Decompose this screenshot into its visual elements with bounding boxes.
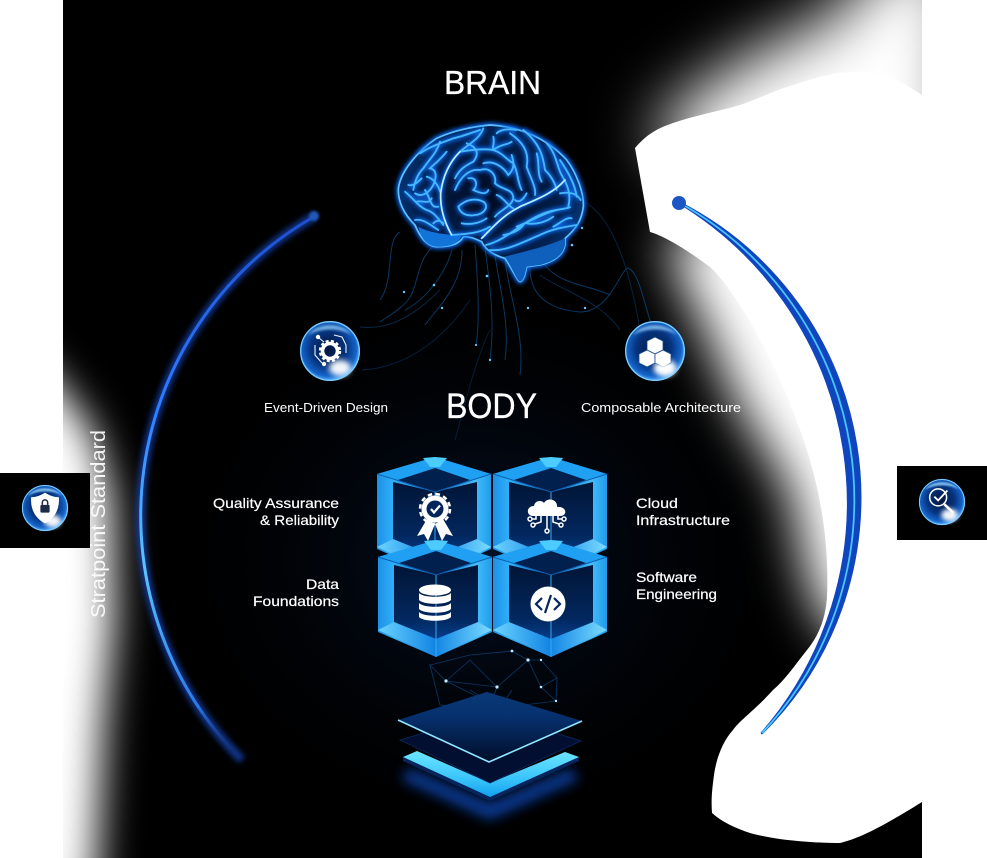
label: Software Engineering: Software	[636, 569, 697, 585]
node: Composable Architecture	[581, 321, 741, 415]
white torn shape on right side	[635, 72, 922, 843]
top plate	[398, 692, 582, 762]
icon: cloud circuit	[528, 500, 566, 533]
label: Cloud Infrastructure	[636, 495, 730, 528]
left arc	[141, 211, 319, 760]
label: Software Engineering	[636, 569, 717, 602]
icon: code brackets	[530, 586, 566, 622]
label: Data Foundations: Foundations	[253, 593, 339, 609]
icon: glowing brain	[398, 125, 583, 282]
heading: BODY: BODY	[446, 387, 537, 426]
label: Event-Driven Design	[264, 401, 388, 415]
side badge: security	[0, 473, 90, 548]
label: Cloud Infrastructure: Cloud	[636, 495, 678, 511]
bright bottom plate	[403, 751, 579, 801]
icon: hexagon cubes orb	[625, 321, 685, 381]
network mesh above platform	[430, 650, 557, 710]
icon: shield lock orb	[22, 485, 68, 531]
label: Software Engineering: Engineering	[636, 586, 717, 602]
icon: gear orb	[300, 321, 360, 381]
label: Data Foundations	[253, 576, 339, 609]
dark middle plate	[400, 728, 581, 783]
label: Quality Assurance & Reliability: Quality Assurance	[213, 495, 339, 511]
right arc	[672, 196, 860, 733]
icon: database	[419, 584, 451, 621]
cube: data foundations	[378, 540, 492, 657]
cube: quality assurance	[377, 457, 491, 574]
tendril nodes	[403, 227, 586, 361]
label: Data Foundations: Data	[306, 576, 339, 592]
label: Quality Assurance & Reliability: & Reliability	[260, 512, 339, 528]
layered platform	[398, 692, 582, 820]
icon: rosette	[417, 494, 453, 541]
label: Composable Architecture	[581, 401, 741, 415]
node: Event-Driven Design	[264, 321, 388, 415]
neural tendrils below brain	[360, 198, 655, 440]
cube grid	[377, 457, 607, 657]
icon: magnifier check orb	[919, 479, 965, 525]
label: Quality Assurance & Reliability	[213, 495, 339, 528]
cube: software engineering	[493, 540, 607, 657]
side badge: quality check	[897, 466, 987, 540]
label: Cloud Infrastructure: Infrastructure	[636, 512, 730, 528]
platform glow	[402, 768, 578, 820]
title: BRAIN: BRAIN	[444, 64, 541, 101]
side label: Stratpoint Standard: Stratpoint Standard	[88, 430, 110, 618]
cube: cloud infrastructure	[493, 457, 607, 574]
